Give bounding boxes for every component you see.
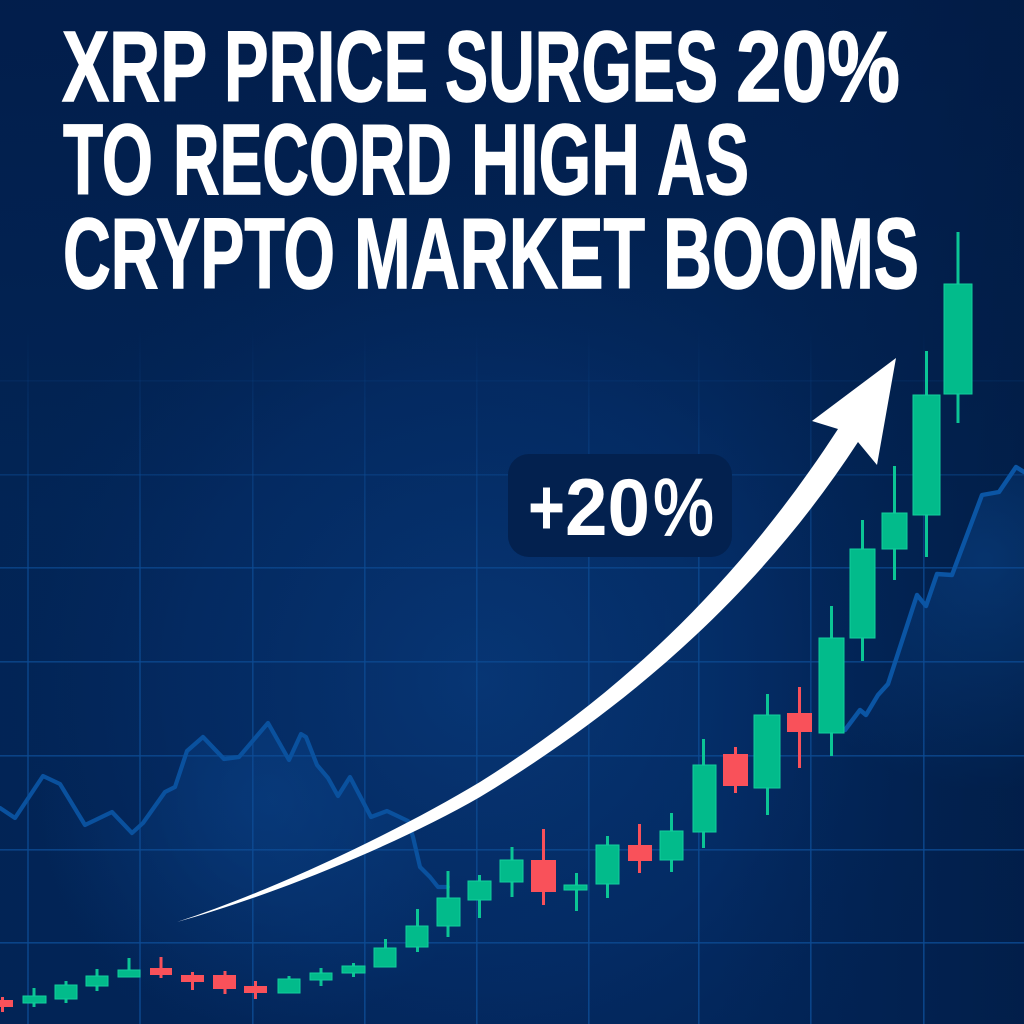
candle 30 green — [913, 351, 940, 557]
title: SURGES — [445, 11, 718, 123]
candle 29 green — [882, 466, 907, 580]
candle 6 red — [150, 957, 172, 978]
candle 26 red — [787, 687, 812, 768]
candle 17 green — [500, 847, 523, 897]
candle 2 green — [23, 988, 46, 1007]
candle 5 green — [118, 958, 140, 977]
title: RECORD — [173, 104, 452, 216]
title — [62, 11, 919, 310]
candle 1 red — [0, 997, 13, 1012]
title: 20% — [736, 11, 900, 123]
candle 13 green — [374, 939, 396, 967]
candle 23 green — [693, 739, 716, 848]
title: PRICE — [224, 11, 428, 123]
callout: +20% badge — [508, 454, 732, 557]
candle 19 green doji — [564, 873, 587, 911]
candle 11 green — [310, 968, 332, 986]
callout: +20% badge: % — [653, 463, 714, 553]
candle 14 green — [406, 909, 428, 952]
title: TO — [63, 104, 153, 216]
callout: +20% badge: + — [528, 463, 565, 553]
title: AS — [657, 104, 749, 216]
title: CRYPTO — [63, 198, 335, 310]
title: XRP — [62, 11, 206, 123]
candlestick chart — [0, 232, 972, 1012]
title: MARKET — [354, 198, 645, 310]
candle 16 green — [468, 875, 491, 918]
candle 22 green — [660, 813, 683, 872]
candle 4 green — [86, 969, 108, 991]
candle 8 red — [213, 971, 236, 994]
candle 27 green — [819, 606, 844, 756]
candle 12 green — [342, 963, 365, 977]
candle 15 green — [437, 871, 460, 937]
candle 28 green — [850, 520, 875, 661]
callout: +20% badge: 20 — [565, 463, 650, 553]
candle 10 green — [278, 976, 300, 993]
candle 25 green — [754, 694, 780, 815]
candle 24 red — [723, 747, 748, 793]
candle 31 green — [944, 232, 972, 423]
candle 18 red — [531, 829, 556, 905]
candle 21 red — [628, 824, 652, 873]
candle 7 red — [181, 972, 204, 990]
title: HIGH — [471, 104, 640, 216]
candle 3 green — [55, 981, 77, 1003]
area chart: background blue price line — [0, 467, 1024, 1024]
candle 9 red — [244, 981, 267, 999]
arrow: white upward curved arrow — [177, 358, 896, 922]
candle 20 green — [596, 836, 619, 898]
